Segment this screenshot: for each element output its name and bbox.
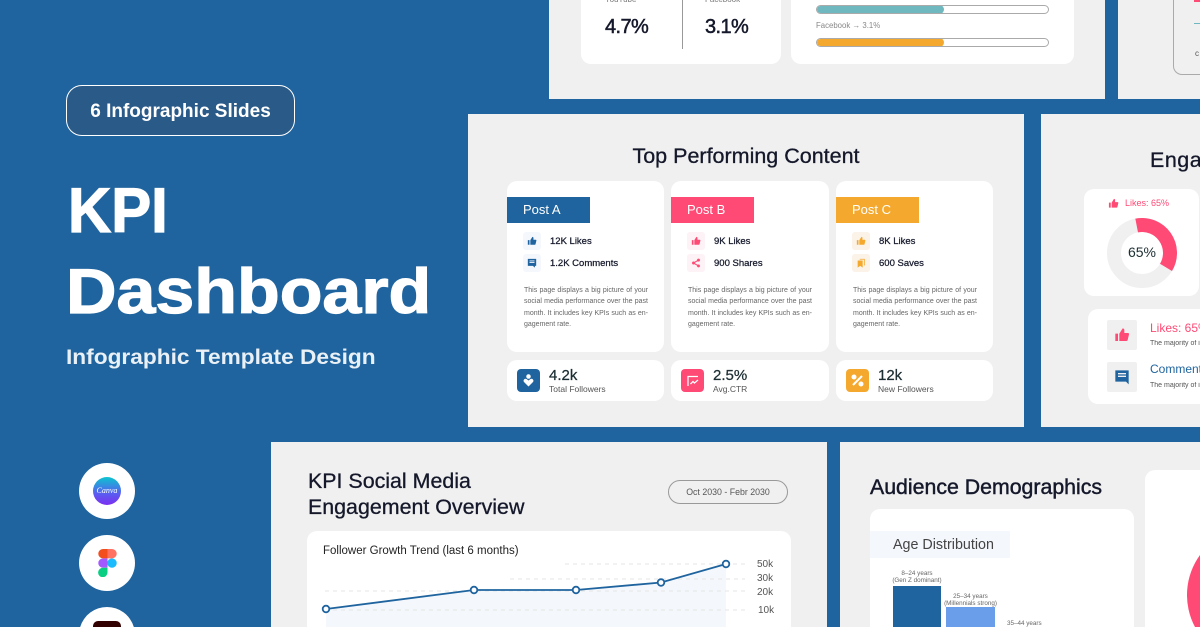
progress bar: orange [816,38,1049,47]
donut value: 65% [1128,244,1156,260]
label: 18-24 years: 8–24 years [901,570,933,577]
axis label: 20k: 20k [757,587,773,598]
stat: YouTube rate: 4.7% [605,16,648,38]
tag: Post C [836,197,919,223]
icon: saves [852,254,870,272]
card: cropped pie chart [1145,470,1200,627]
heading: Top Performing Content [632,144,860,168]
badge: 6 infographic slides [66,85,295,136]
left column: cover text [66,85,431,369]
description: month. It includes key KPIs such as en- [688,310,812,317]
label: Avg.CTR [713,384,747,394]
legend text fragment: c [1195,49,1199,58]
icon: comments [523,254,541,272]
card: age distribution [870,509,1134,627]
icon: likes [687,232,705,250]
donut chart [1107,218,1177,288]
card: platform progress bars [791,0,1074,64]
stat card: average CTR [671,360,829,401]
band: chart heading [870,531,1010,558]
label: 18-24 years: (Gen Z dominant) [892,577,942,584]
title line: Dashboard: Dashboard [66,257,431,327]
heading: Audience Demographics [870,475,1102,499]
card: outlined legend [1173,0,1200,75]
icon: likes [523,232,541,250]
description: This page displays a big picture of your [524,287,648,294]
icon: Canva badge [79,463,135,519]
description: gagement rate. [853,321,900,328]
icon: shares [687,254,705,272]
description: This page displays a big picture of your [688,287,812,294]
label: likes: Likes: 65% [1125,198,1169,208]
title line: KPI: KPI [68,176,168,246]
value: 4.2k [549,367,577,384]
icon: Canva badge: Canva [97,486,117,495]
panel: Top Performing Content [468,114,1024,427]
pie chart [1187,555,1200,627]
stat card: new followers [836,360,993,401]
label: 35-44 years: 35–44 years [1007,620,1042,627]
tag: Post B: Post B [687,202,725,217]
divider between platforms [682,0,683,49]
tag: Post A [507,197,590,223]
metric: likes: 12K Likes [550,236,592,247]
card: Post C [836,181,993,352]
tag: Post A: Post A [523,202,561,217]
legend mark: pink [1194,0,1200,2]
label: 18-24 years [892,570,942,584]
description: gagement rate. [688,321,735,328]
panel: cropped slide top right [1118,0,1200,99]
label: 25-34 years [944,593,997,607]
description: month. It includes key KPIs such as en- [853,310,977,317]
heading [308,469,525,519]
label: 25-34 years: (Millennials strong) [944,600,997,607]
caption: likes: The majority of i [1150,340,1200,347]
icon: percent [846,369,869,392]
axis label: 10k: 10k [758,605,774,616]
date range pill: Oct 2030 - Febr 2030 [686,487,770,497]
metric: likes: 9K Likes [714,236,750,247]
metric: saves: 600 Saves [879,258,924,269]
icon: comments [1107,362,1137,392]
icon: followers [517,369,540,392]
label: New Followers [878,384,934,394]
description [688,286,812,328]
panel: KPI Social Media Engagement Overview [271,442,827,627]
icon: likes [852,232,870,250]
icon: likes [1107,320,1137,350]
description: social media performance over the past [688,298,812,305]
value: 2.5% [713,367,747,384]
bar: 25-34 years [946,607,995,627]
line chart [322,560,745,627]
label: Total Followers [549,384,606,394]
progress bar: teal [816,5,1049,14]
heading: KPI Social Media [308,469,471,493]
icon: Figma badge [79,535,135,591]
description [524,286,648,328]
label: Facebook progress: Facebook → 3.1% [816,21,880,30]
card: likes donut [1084,189,1199,296]
card: follower growth [307,531,791,627]
chart title: Follower Growth Trend (last 6 months) [323,545,519,557]
axis label: 30k: 30k [757,573,773,584]
panel: Audience Demographics [840,442,1200,627]
metric: likes: 8K Likes [879,236,915,247]
description: social media performance over the past [853,298,977,305]
description [853,286,977,328]
value: 12k [878,367,902,384]
description: This page displays a big picture of your [853,287,977,294]
band: chart heading: Age Distribution [893,537,994,553]
legend mark: teal [1194,23,1200,24]
stat: Facebook rate: 3.1% [705,16,748,38]
card: Post B [671,181,829,352]
icon: third tool badge [80,607,134,627]
heading: Engagement Overview [308,495,524,519]
card: platform rates [581,0,781,64]
card: engagement breakdown [1088,309,1200,404]
tag: Post C: Post C [852,202,891,217]
bar: 18-24 years [893,586,941,627]
tag: Post B [671,197,754,223]
panel: cropped engagement slide [1041,114,1200,427]
stat card: total followers [507,360,664,401]
description: social media performance over the past [524,298,648,305]
badge: 6 infographic slides: 6 Infographic Slides [90,101,271,122]
axis label: 50k: 50k [757,559,773,570]
card: Post A [507,181,664,352]
description: month. It includes key KPIs such as en- [524,310,648,317]
date range pill [668,480,788,504]
subtitle: Infographic Template Design [66,345,376,369]
label: 25-34 years: 25–34 years [953,593,988,600]
caption: comments: The majority of i [1150,382,1200,389]
description: gagement rate. [524,321,571,328]
metric: shares: 900 Shares [714,258,763,269]
metric: comments: 1.2K Comments [550,258,618,269]
icon: CTR [681,369,704,392]
icon: thumbs up [1108,198,1118,208]
panel: top slide with platform engagement [549,0,1105,99]
